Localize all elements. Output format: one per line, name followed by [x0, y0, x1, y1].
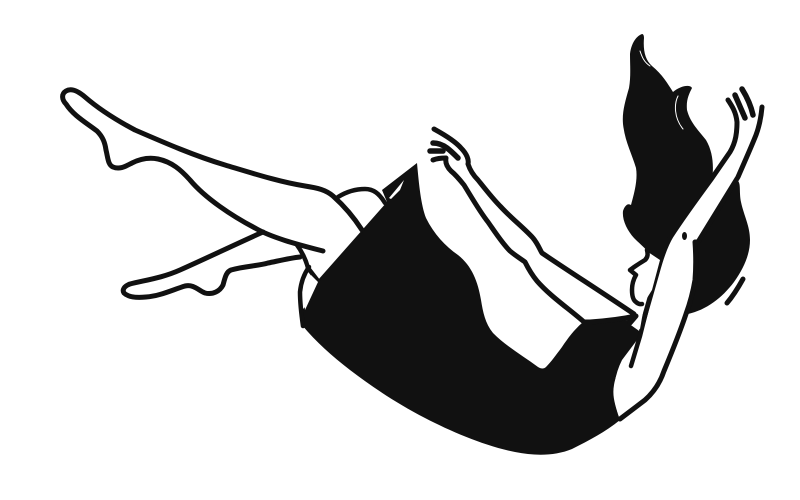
back of thigh under dress — [338, 189, 385, 203]
finger — [735, 95, 745, 118]
hidden leg inner line — [297, 245, 318, 281]
upper extended leg — [63, 90, 362, 251]
dress highlight sliver — [389, 180, 404, 199]
arm top edge — [434, 129, 634, 314]
figure — [63, 34, 762, 455]
left arm and hand — [430, 129, 636, 323]
hip line — [304, 275, 318, 310]
small white triangle near collar — [628, 312, 643, 329]
hair highlight — [675, 96, 683, 129]
hair accent stroke — [727, 279, 743, 303]
finger — [433, 143, 458, 158]
lower bent leg — [123, 232, 300, 297]
finger — [430, 148, 443, 154]
finger — [742, 89, 753, 115]
arm upper edge — [643, 100, 737, 322]
arm bottom edge — [433, 158, 636, 323]
face profile — [630, 252, 660, 306]
hair highlight — [640, 51, 650, 66]
dress — [300, 163, 642, 455]
hair: lower lock — [684, 180, 750, 318]
ear — [682, 232, 687, 240]
armpit line — [631, 312, 646, 366]
raised right arm and hand — [614, 89, 762, 419]
hair: upper flowing lock — [623, 34, 713, 262]
arm lower edge — [620, 107, 762, 419]
